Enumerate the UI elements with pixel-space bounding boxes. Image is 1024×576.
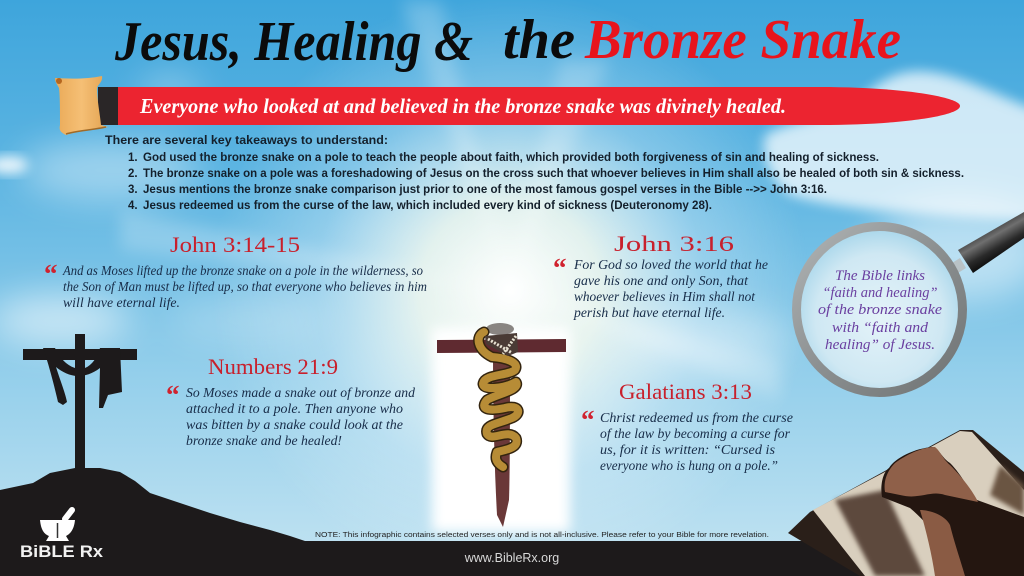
banner: Everyone who looked at and believed in the bronze snake was divinely healed. (139, 94, 786, 118)
verse: Numbers 21:9: Numbers 21:9 (208, 354, 338, 379)
verse: John 3:14-15 (44, 232, 427, 310)
verse: Galatians 3:13: Christ redeemed us from the curse (600, 410, 793, 425)
verse: John 3:16: John 3:16 (614, 231, 734, 256)
verse: Numbers 21:9: bronze snake and be healed! (186, 433, 342, 448)
verse: John 3:14-15: the Son of Man must be lifted up, so that everyone who believes in him (63, 279, 427, 294)
callout: magnifying glass: with “faith and (832, 320, 929, 336)
illustration: cross on hill silhouette (0, 334, 1024, 576)
title: the (503, 9, 575, 71)
verse: John 3:16: gave his one and only Son, that (574, 273, 749, 288)
key takeaways: 3. (128, 184, 138, 196)
verse: John 3:14-15: John 3:14-15 (170, 232, 300, 257)
title: Bronze Snake (584, 9, 901, 71)
key takeaways: God used the bronze snake on a pole to teach the people about faith, which provided both forgiveness of sin and healing of sickness. (143, 152, 879, 164)
verse: John 3:14-15: “ (44, 259, 58, 289)
key takeaways: Jesus redeemed us from the curse of the law, which included every kind of sickness (Deuteronomy 28). (143, 200, 712, 212)
banner (98, 87, 960, 125)
verse: Numbers 21:9 (166, 354, 415, 448)
key takeaways: 2. (128, 168, 138, 180)
verse: Galatians 3:13: of the law by becoming a curse for (600, 426, 791, 441)
callout: magnifying glass: healing” of Jesus. (825, 337, 935, 353)
verse: John 3:16 (553, 231, 768, 320)
verse: John 3:14-15: And as Moses lifted up the bronze snake on a pole in the wilderness, so (62, 263, 423, 278)
verse: John 3:16: perish but have eternal life. (573, 305, 725, 320)
callout: magnifying glass: of the bronze snake (818, 302, 942, 318)
key takeaways: There are several key takeaways to understand: (105, 135, 388, 147)
callout: magnifying glass: The Bible links (835, 268, 925, 284)
key takeaways: 4. (128, 200, 138, 212)
key takeaways: The bronze snake on a pole was a foreshadowing of Jesus on the cross such that whoever believes in Him shall also be healed of both sin & sickness. (143, 168, 964, 180)
verse: Galatians 3:13: Galatians 3:13 (619, 379, 752, 404)
verse: Numbers 21:9: attached it to a pole. Then anyone who (186, 401, 403, 416)
key takeaways: 1. (128, 152, 138, 164)
verse: Numbers 21:9: “ (166, 380, 180, 410)
logo: Bible Rx: BiBLE Rx (20, 542, 104, 561)
title: Jesus, Healing & (114, 11, 473, 73)
verse: Galatians 3:13: “ (581, 405, 594, 435)
title (114, 9, 901, 73)
callout: magnifying glass: “faith and healing” (822, 285, 938, 301)
verse: Galatians 3:13: us, for it is written: “Cursed is (600, 442, 775, 457)
illustration: hands praying on open Bible (788, 430, 1024, 576)
callout: magnifying glass (796, 212, 1024, 392)
verse: John 3:14-15: will have eternal life. (63, 295, 180, 310)
verse: John 3:16: whoever believes in Him shall not (574, 289, 756, 304)
verse: John 3:16: “ (553, 253, 566, 283)
verse: John 3:16: For God so loved the world that he (573, 257, 768, 272)
verse: Numbers 21:9: So Moses made a snake out of bronze and (186, 385, 415, 400)
logo: Bible Rx (20, 510, 104, 561)
illustration: bronze snake on a pole (432, 323, 570, 532)
key takeaways: Jesus mentions the bronze snake comparison just prior to one of the most famous gospel verses in the Bible -->> John 3:16. (143, 184, 827, 196)
verse: Numbers 21:9: was bitten by a snake could look at the (186, 417, 403, 432)
footnote: NOTE: This infographic contains selected verses only and is not all-inclusive. Please refer to your Bible for more revelation. (315, 532, 769, 539)
icon: parchment scroll (55, 76, 108, 135)
verse: Galatians 3:13 (581, 379, 793, 473)
website url: www.BibleRx.org (464, 551, 559, 565)
key takeaways (105, 135, 964, 212)
verse: Galatians 3:13: everyone who is hung on a pole.” (600, 458, 778, 473)
